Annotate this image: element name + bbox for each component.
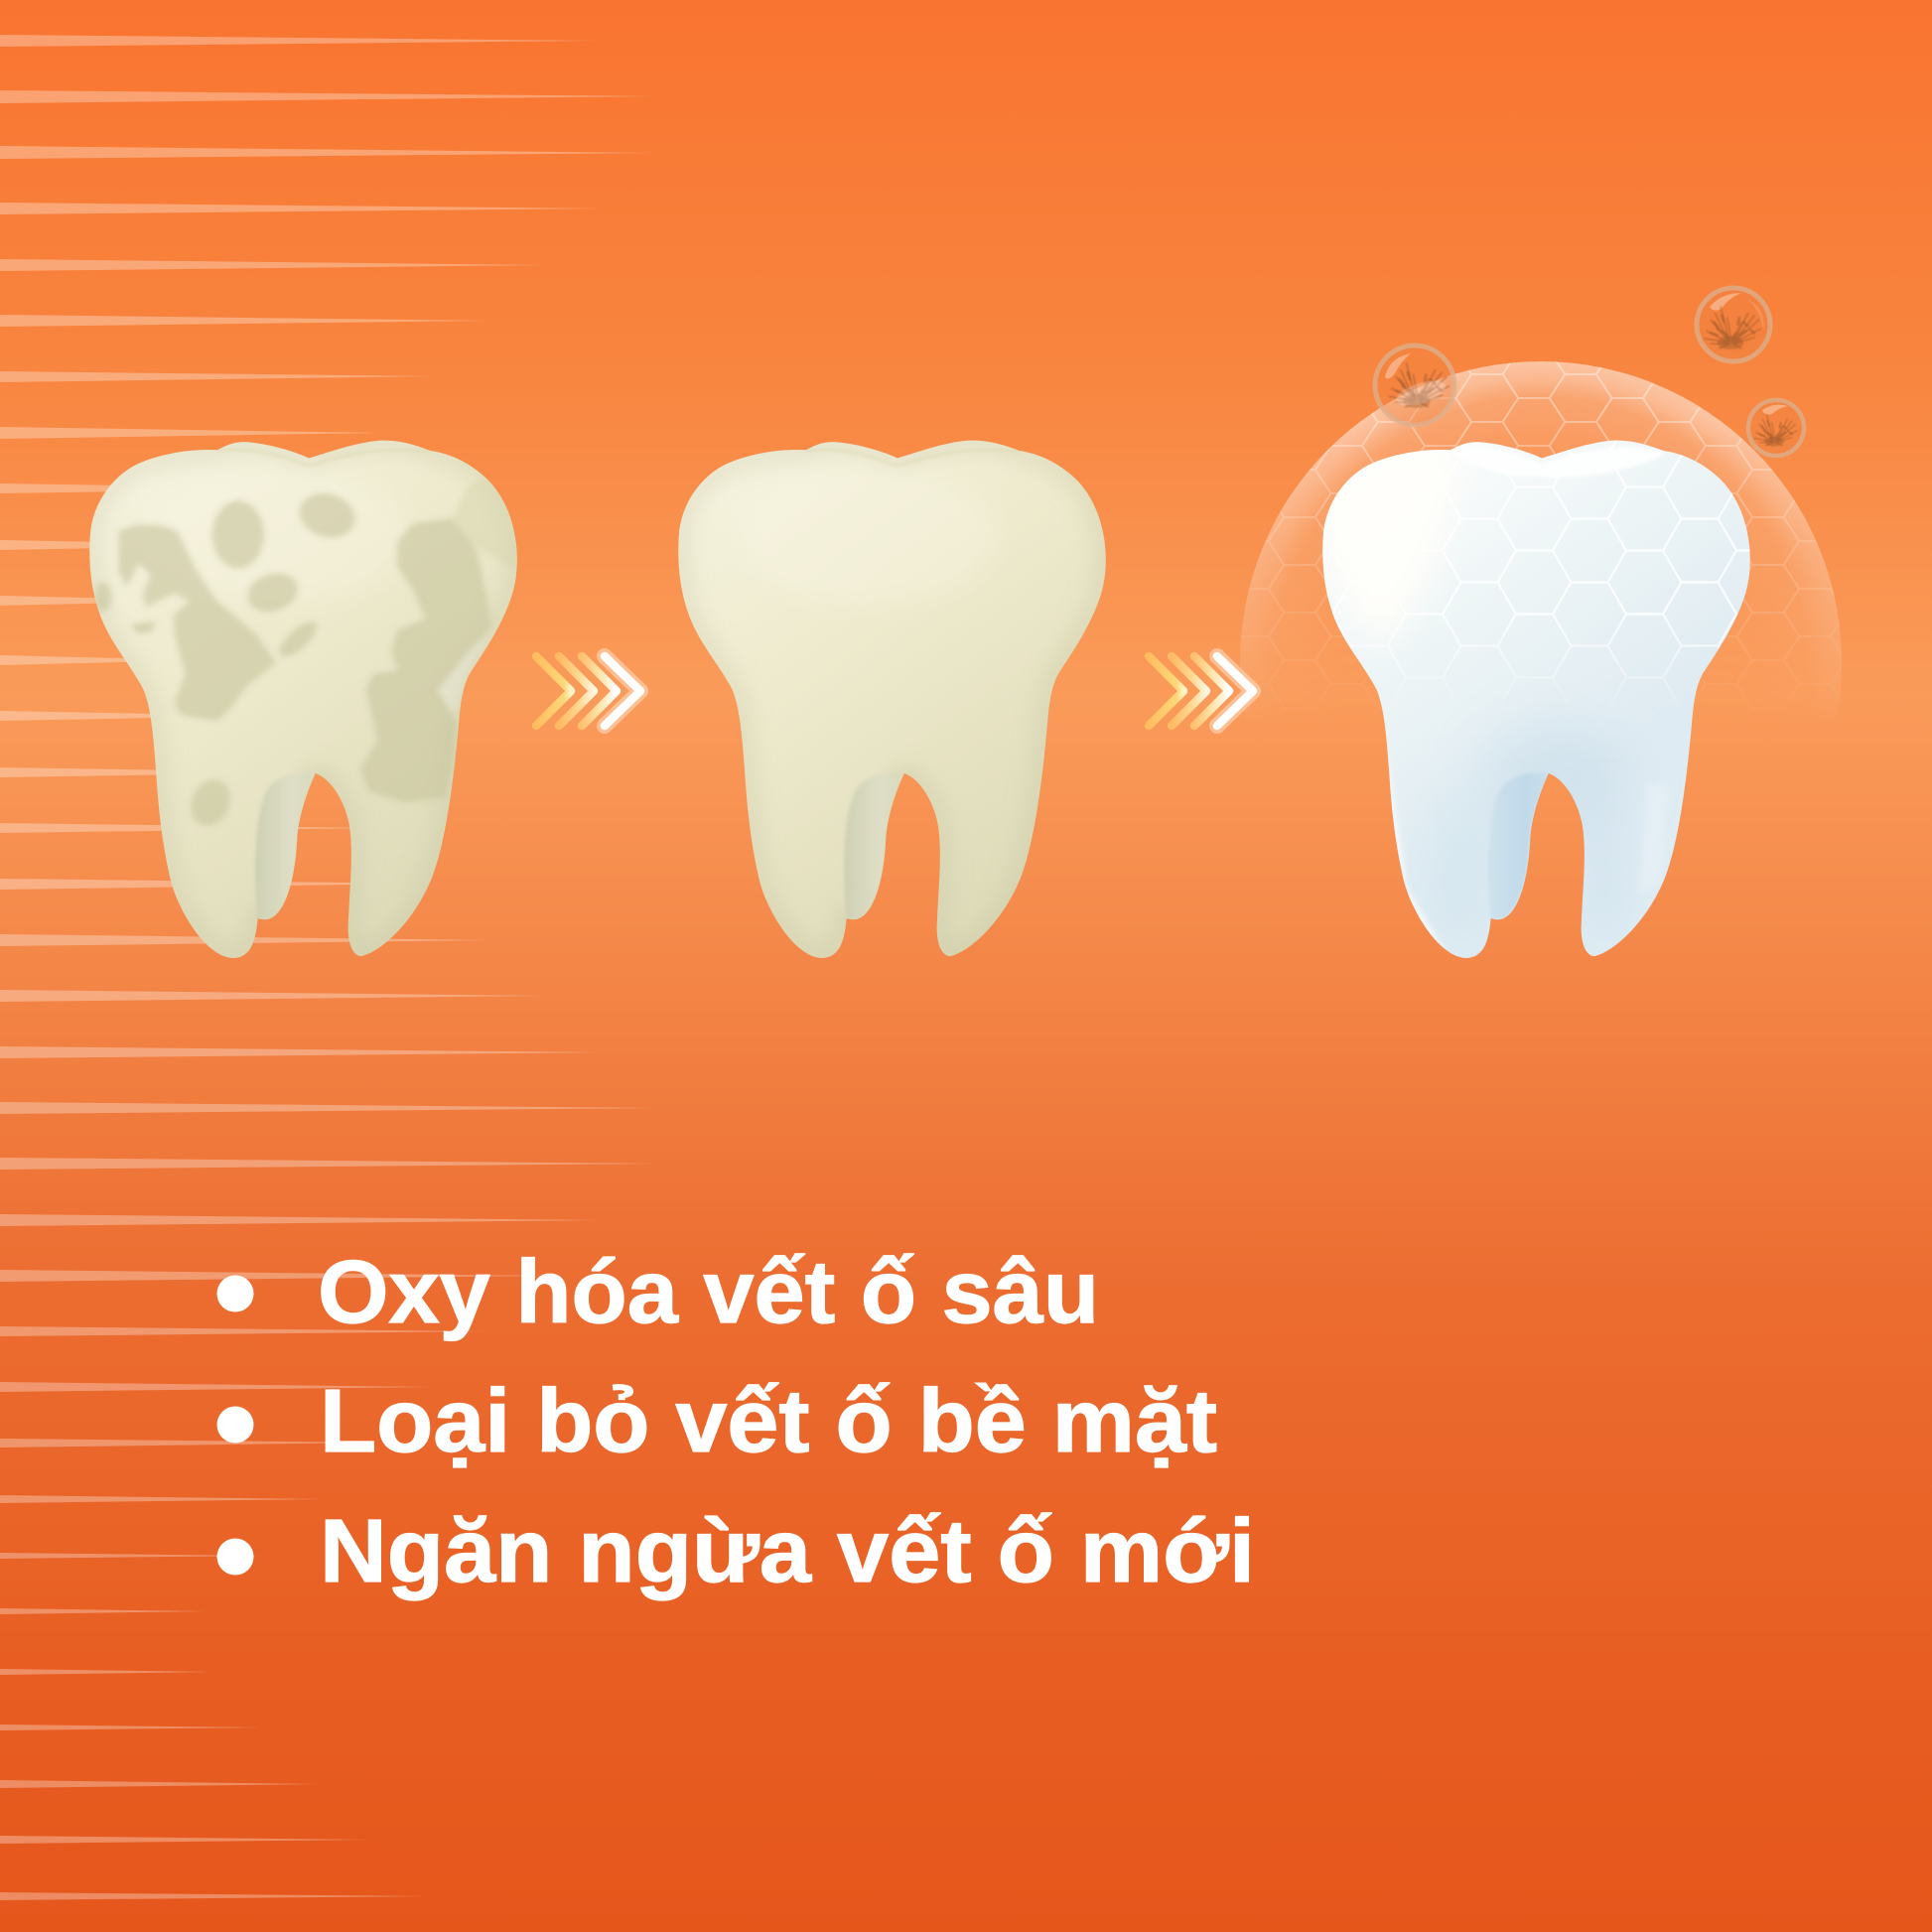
stain bubble right: [1748, 400, 1804, 456]
tooth 2: yellowed tooth: [678, 441, 1106, 958]
arrow: chevrons between tooth 2 and tooth 3: [1149, 656, 1253, 726]
list item 2: Loại bỏ vết ố bề mặt: [320, 1372, 1217, 1471]
honeycomb on tooth: [1322, 441, 1749, 681]
list item 3: Ngăn ngừa vết ố mới: [320, 1502, 1255, 1601]
stain patches: [94, 485, 491, 831]
tooth 1: stained tooth: [89, 441, 519, 958]
white crown highlight: [1322, 448, 1454, 627]
tooth 3: white protected tooth: [1311, 437, 1767, 961]
stain bubble on dome: [1375, 345, 1454, 425]
speed streaks on left edge: [0, 35, 655, 1900]
list item 1: Oxy hóa vết ố sâu: [318, 1243, 1099, 1342]
benefit list: [216, 1243, 1255, 1601]
arrow: chevrons between tooth 1 and tooth 2: [536, 656, 640, 726]
protective dome with honeycomb: [1240, 361, 1842, 701]
stain bubble top right: [1697, 288, 1770, 361]
